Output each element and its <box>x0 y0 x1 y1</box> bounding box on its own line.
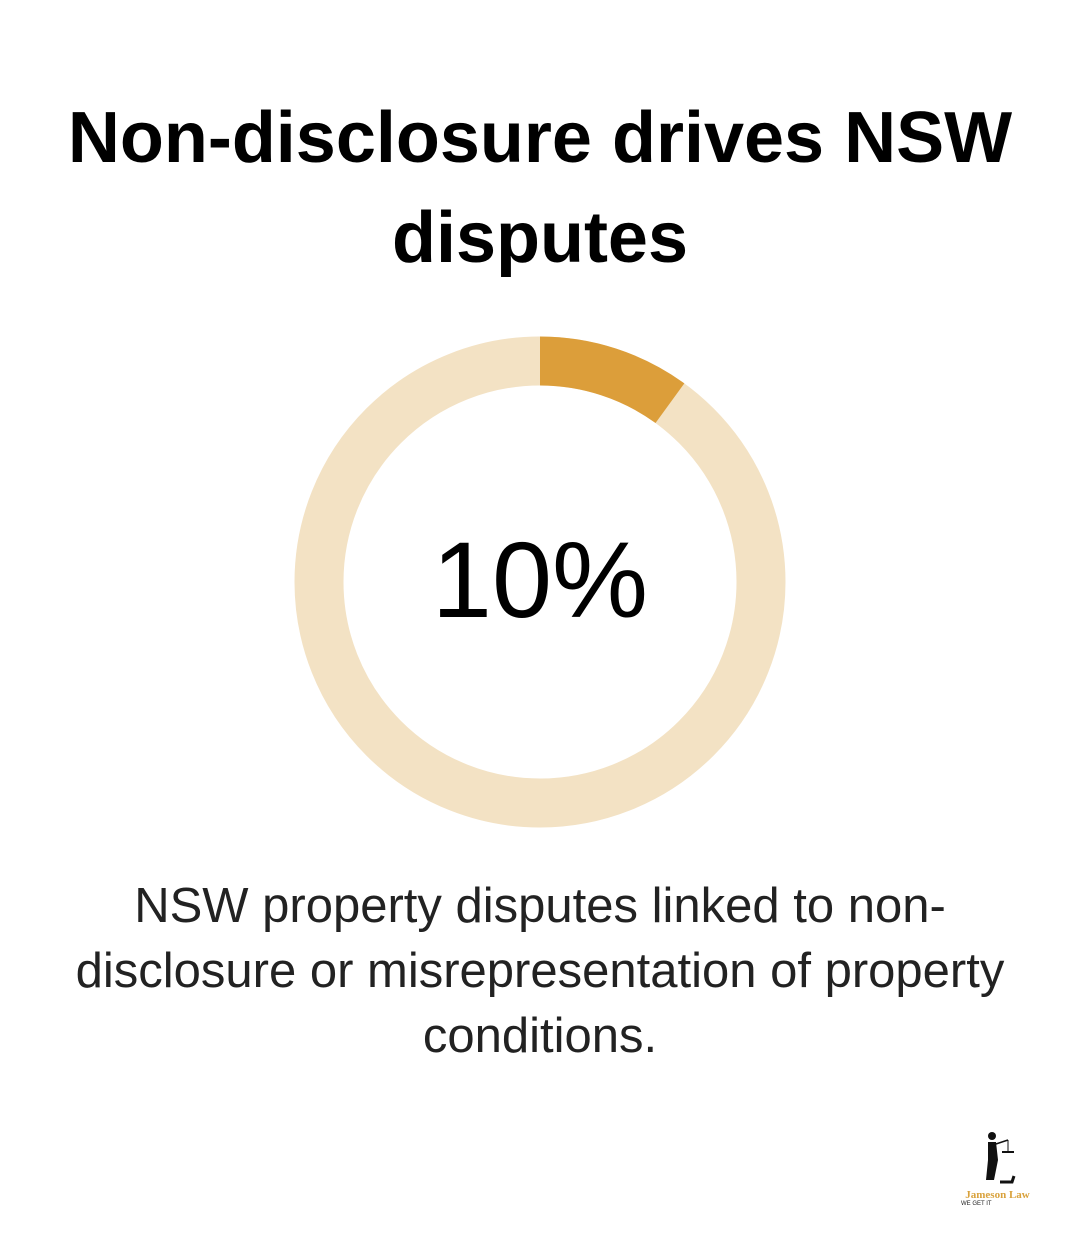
description: conditions. <box>423 1009 657 1063</box>
logo: WE GET IT <box>961 1201 992 1207</box>
donut chart: 10% <box>432 519 648 640</box>
title: Non-disclosure drives NSW <box>68 98 1012 178</box>
description: NSW property disputes linked to non- <box>134 879 946 933</box>
description: disclosure or misrepresentation of property <box>76 944 1004 998</box>
logo: Jameson Law <box>965 1189 1030 1201</box>
logo <box>961 1132 1030 1207</box>
title <box>68 98 1012 278</box>
description <box>76 879 1004 1063</box>
title: disputes <box>392 198 688 278</box>
